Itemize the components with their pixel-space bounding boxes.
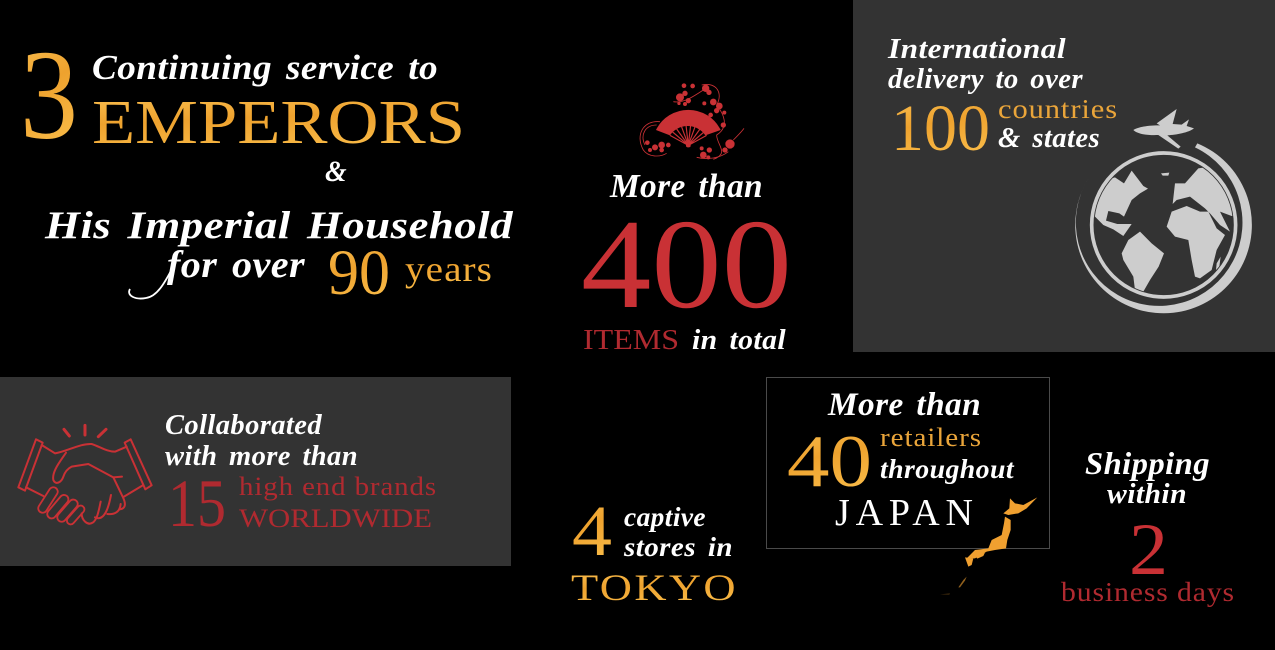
collaborated text: Collaborated — [165, 410, 323, 441]
icon: map of Japan — [940, 497, 1037, 595]
panel: Tokyo stores — [571, 491, 738, 609]
panel: emperors — [20, 24, 513, 309]
icon: fan with blossoms — [640, 83, 744, 159]
business days: business days — [1061, 577, 1235, 607]
icon: globe and plane — [1075, 109, 1252, 313]
panel: Japan retailers — [766, 378, 1050, 595]
years: years — [405, 249, 493, 289]
continents — [1094, 168, 1232, 292]
icon: handshake — [18, 425, 152, 524]
more than text: More than — [609, 168, 763, 205]
EMPERORS heading: EMPERORS — [92, 89, 465, 157]
number 4: 4 — [572, 491, 612, 571]
ITEMS: ITEMS — [583, 324, 679, 356]
throughout: throughout — [880, 454, 1015, 484]
plane — [1133, 109, 1194, 149]
JAPAN: JAPAN — [835, 492, 973, 534]
panel: shipping — [1061, 445, 1235, 607]
orbit swoosh — [1075, 143, 1252, 313]
more than text: More than — [827, 387, 981, 423]
number 400: 400 — [581, 193, 792, 335]
WORLDWIDE: WORLDWIDE — [239, 504, 432, 533]
delivery text: delivery to over — [888, 63, 1083, 95]
panel: items — [581, 83, 792, 356]
number 2: 2 — [1129, 509, 1168, 591]
stores in text: stores in — [623, 532, 733, 562]
and states: & states — [998, 123, 1100, 154]
captive text: captive — [624, 502, 706, 532]
ring — [1092, 153, 1236, 297]
with more than text: with more than — [165, 441, 358, 472]
for over text: for over — [167, 244, 306, 286]
number 100: 100 — [891, 92, 990, 165]
number 15: 15 — [168, 465, 226, 541]
TOKYO: TOKYO — [571, 568, 738, 609]
within text: within — [1107, 479, 1187, 510]
for over text — [129, 244, 306, 299]
panel: international delivery — [853, 0, 1275, 352]
international text: International — [887, 33, 1067, 65]
panel: collaborations — [0, 377, 511, 566]
in total: in total — [692, 324, 787, 356]
number 40: 40 — [787, 421, 872, 503]
number 90: 90 — [328, 237, 390, 309]
countries: countries — [998, 94, 1118, 124]
continuing service text: Continuing service to — [92, 48, 438, 87]
retailers: retailers — [880, 423, 982, 452]
big number 3: 3 — [20, 24, 78, 166]
ampersand: & — [325, 155, 347, 188]
high end brands: high end brands — [239, 472, 437, 501]
imperial household text: His Imperial Household — [44, 204, 513, 247]
shipping text: Shipping — [1085, 445, 1210, 481]
